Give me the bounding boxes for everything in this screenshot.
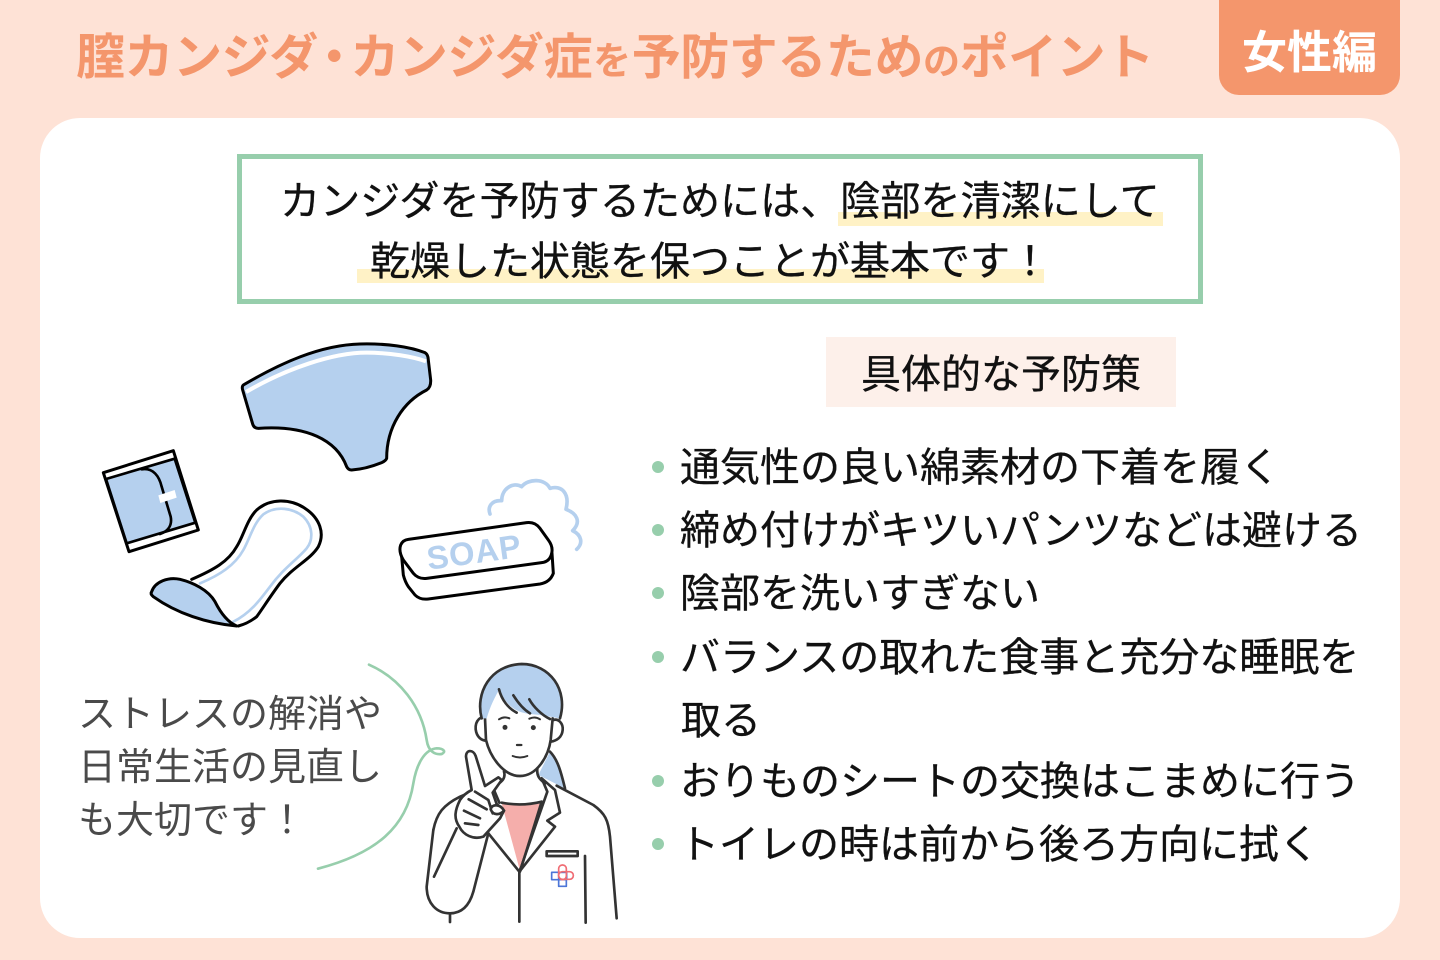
illustration: doctor with speech curve (316, 662, 618, 924)
key message line 1: カンジダを予防するためには、陰部を清潔にして (280, 180, 1160, 224)
bullet list (652, 446, 1362, 867)
bullet list: バランスの取れた食事と充分な睡眠を (680, 636, 1359, 680)
icon: soap bar: SOAP (424, 527, 524, 577)
ponytail (538, 752, 565, 788)
neck and face (476, 693, 563, 785)
category tag: 女性編 (1242, 27, 1377, 78)
bullet list: トイレの時は前から後ろ方向に拭く (679, 823, 1319, 867)
bullet list: 締め付けがキツいパンツなどは避ける (680, 509, 1362, 553)
advice text: 日常生活の見直し (78, 747, 382, 789)
icon: sanitary pad (151, 501, 321, 626)
highlight: second line (357, 269, 1044, 283)
icon: packaged sanitary pad (103, 451, 198, 552)
icon: soap bar (400, 481, 581, 599)
key message line 2: 乾燥した状態を保つことが基本です！ (370, 240, 1050, 284)
raised hand (455, 751, 504, 838)
advice text: ストレスの解消や (78, 694, 382, 736)
advice text: も大切です！ (78, 800, 306, 842)
illustration: hygiene items (102, 342, 583, 628)
bullet markers (652, 461, 664, 850)
speech curve (318, 665, 444, 869)
advice text (78, 694, 382, 842)
bullet list: おりものシートの交換はこまめに行う (680, 760, 1360, 804)
lab coat (427, 778, 617, 923)
bullet list: 取る (681, 699, 761, 743)
category tag (1219, 0, 1400, 95)
bullet list: 通気性の良い綿素材の下着を履く (680, 446, 1280, 490)
highlight: first line (838, 212, 1163, 226)
hair (480, 664, 562, 719)
bullet list: 陰部を洗いすぎない (680, 572, 1040, 616)
heading: concrete measures: 具体的な予防策 (861, 353, 1141, 397)
icon: badge cross (552, 865, 573, 886)
heading: concrete measures (826, 337, 1176, 407)
title: 膣カンジダ・カンジダ症を予防するためのポイント (76, 31, 1154, 85)
icon: underwear (242, 344, 431, 470)
key message box (237, 154, 1203, 304)
